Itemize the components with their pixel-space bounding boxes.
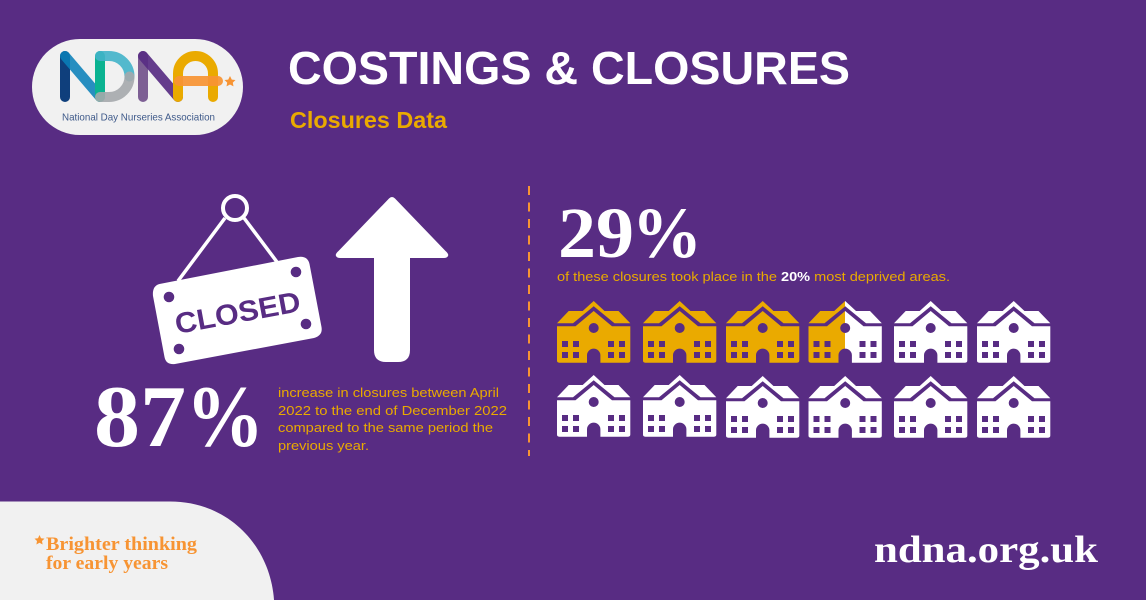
tagline [34,534,202,574]
house row 2 [557,375,1050,438]
stat: 87%: 87 [94,369,186,466]
deprived areas description: of these closures took place in the 20% most deprived areas. [557,269,950,284]
pictogram: houses [557,301,1050,438]
stat: 29%: % [632,193,702,273]
icon: closed sign [153,196,322,364]
stat: 29%: 29 [558,193,634,273]
tagline: for early years [46,553,168,574]
house row 1 [557,301,1050,363]
subtitle: Closures Data [290,107,447,133]
stat: 29% [558,193,702,273]
icon: up arrow [336,197,448,362]
website url: ndna.org.uk [874,529,1099,571]
closures description: increase in closures between April [278,385,499,400]
title: COSTINGS & CLOSURES [288,42,850,94]
logo letters NDNA [65,56,218,97]
closures description: 2022 to the end of December 2022 [278,403,507,418]
tagline: Brighter thinking [46,534,198,555]
closures description: compared to the same period the [278,420,493,435]
footer panel [0,502,274,600]
logo name: National Day Nurseries Association [62,112,215,124]
stat: 87% [94,369,264,466]
sign text: CLOSED [172,286,303,341]
closures description: previous year. [278,438,369,453]
logo star [224,76,236,86]
stat: 87%: % [186,369,264,466]
logo [32,39,243,135]
tagline star [34,535,44,544]
